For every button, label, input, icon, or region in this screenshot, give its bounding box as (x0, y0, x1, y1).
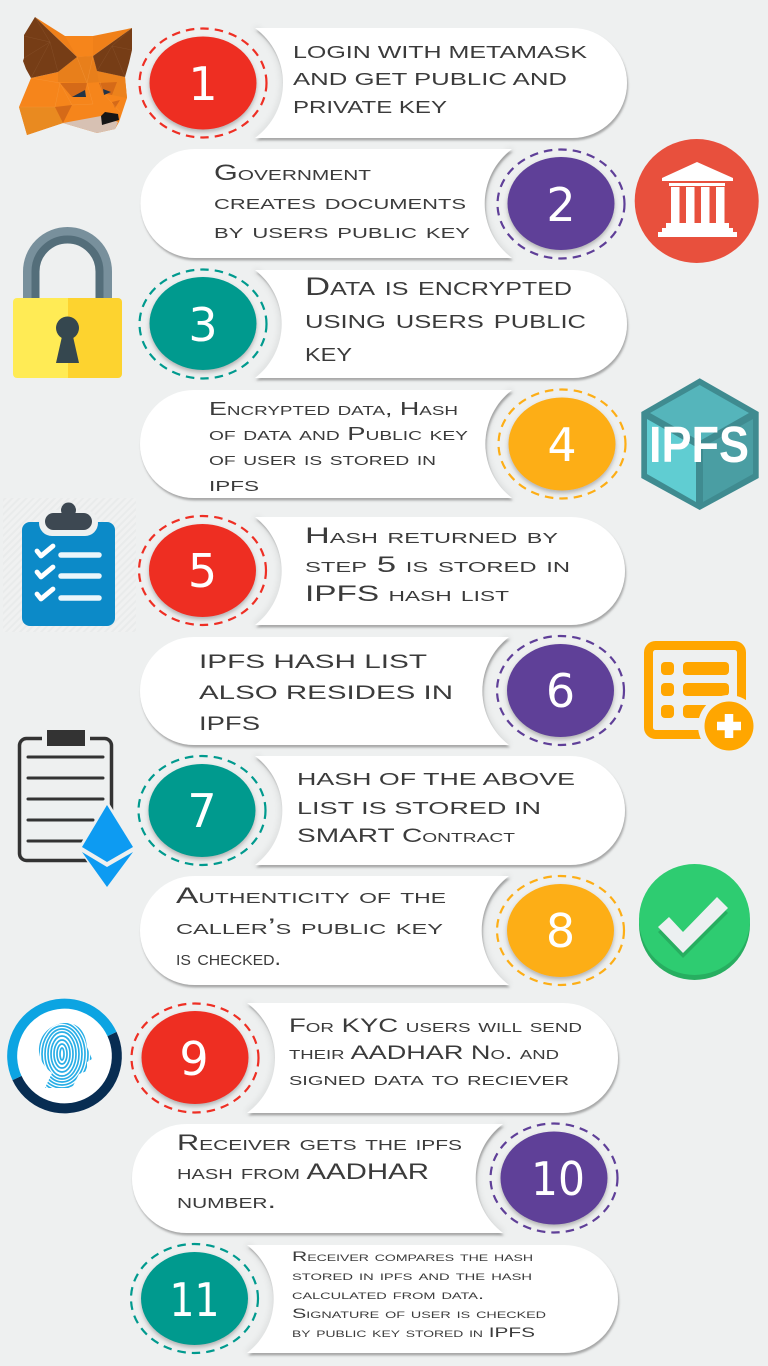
text 8: Authenticity of the (176, 883, 446, 908)
ribbon 6 (140, 637, 509, 745)
step 5 (139, 516, 625, 625)
icon: fingerprint head (12, 1004, 117, 1108)
text 7: HASH OF THE ABOVE (297, 769, 575, 789)
icon: government building (635, 139, 759, 263)
text 5: Hash returned by (305, 523, 558, 548)
number badge 6 (497, 636, 624, 745)
ribbon 9 (247, 1003, 618, 1113)
number badge 2: 2 (546, 178, 576, 232)
number badge 9 (132, 1004, 258, 1112)
text 11: by public key stored in IPFS (292, 1325, 535, 1340)
icon: IPFS cube (641, 378, 759, 510)
text 11: calculated from data. (292, 1287, 484, 1302)
icon: IPFS cube: IPFS (649, 416, 749, 473)
text 5: step 5 is stored in (305, 552, 570, 577)
step 11 (131, 1244, 618, 1353)
text 5: IPFS hash list (305, 581, 509, 606)
number badge 11: 11 (170, 1273, 220, 1327)
number badge 6: 6 (546, 664, 575, 718)
text 10: number. (177, 1188, 276, 1213)
number badge 3: 3 (188, 298, 218, 352)
step 6 (140, 636, 624, 745)
text 6: IPFS HASH LIST (199, 652, 428, 673)
text 9: signed data to reciever (289, 1069, 569, 1090)
text 4: of user is stored in (209, 448, 436, 469)
step 10 (132, 1124, 618, 1233)
ribbon 8 (140, 876, 509, 985)
ribbon 2 (140, 149, 512, 258)
icon: green check (639, 864, 750, 980)
number badge 10: 10 (531, 1152, 585, 1206)
text 9 (289, 1016, 582, 1090)
text 8: caller’s public key (176, 914, 443, 939)
ribbon 11 (247, 1245, 618, 1353)
text 1: AND GET PUBLIC AND (293, 69, 567, 89)
ribbon 10 (132, 1124, 503, 1233)
ribbon 5 (255, 517, 625, 625)
text 11 (292, 1249, 547, 1340)
number badge 7: 7 (187, 784, 217, 838)
text 2: Government (214, 160, 371, 185)
step 1 (140, 28, 627, 138)
step 7 (138, 756, 625, 865)
icon: list with plus (648, 646, 760, 757)
number badge 10 (490, 1124, 618, 1232)
number badge 8: 8 (546, 904, 575, 958)
text 2: by users public key (214, 218, 470, 243)
text 7: LIST IS STORED IN (297, 798, 541, 818)
text 10: Receiver gets the ipfs (177, 1130, 462, 1155)
text 11: stored in ipfs and the hash (292, 1268, 532, 1283)
number badge 5 (139, 516, 266, 625)
text 4: Encrypted data, Hash (209, 398, 458, 419)
text 6 (199, 652, 453, 735)
ribbon 3 (255, 270, 627, 378)
icon: contract with ethereum (20, 728, 137, 892)
number badge 8 (497, 876, 624, 985)
text 11: Receiver compares the hash (292, 1249, 533, 1264)
text 10 (177, 1130, 462, 1213)
text 8 (176, 883, 446, 970)
text 3: key (305, 339, 352, 367)
text 4: IPFS (209, 478, 259, 495)
number badge 4: 4 (547, 418, 577, 472)
text 3: using users public (305, 306, 586, 334)
text 4 (209, 398, 468, 495)
text 9: For KYC users will send (289, 1016, 582, 1037)
text 2: creates documents (214, 189, 466, 214)
step 9 (132, 1003, 618, 1113)
text 10: hash from AADHAR (177, 1159, 429, 1184)
step 4 (140, 390, 626, 498)
text 9: their AADHAR No. and (289, 1043, 559, 1064)
text 11: Signature of user is checked (292, 1306, 547, 1321)
number badge 1: 1 (188, 57, 218, 111)
icon: metamask fox (19, 17, 132, 135)
number badge 7 (138, 756, 266, 865)
ribbon 7 (255, 756, 625, 865)
number badge 9: 9 (179, 1032, 209, 1086)
number badge 4 (498, 390, 626, 498)
text 1: PRIVATE KEY (293, 97, 447, 117)
number badge 1 (140, 28, 266, 138)
number badge 3 (140, 270, 266, 378)
text 7: SMART Contract (297, 826, 515, 847)
text 4: of data and Public key (209, 423, 468, 444)
number badge 11 (131, 1244, 258, 1353)
text 8: is checked. (176, 945, 281, 970)
text 5 (305, 523, 570, 606)
step 8 (140, 876, 624, 985)
text 6: ALSO RESIDES IN (199, 683, 453, 704)
step 2 (140, 149, 624, 258)
number badge 5: 5 (188, 544, 217, 598)
icon: checklist clipboard (3, 498, 136, 632)
text 3: Data is encrypted (305, 273, 572, 301)
text 7 (297, 769, 575, 847)
number badge 2 (498, 150, 624, 258)
text 1: LOGIN WITH METAMASK (293, 42, 587, 62)
text 1 (293, 42, 587, 117)
step 3 (140, 270, 627, 378)
ribbon 1 (255, 28, 627, 138)
ribbon 4 (140, 390, 512, 498)
text 6: IPFS (199, 714, 260, 735)
text 3 (305, 273, 586, 367)
icon: padlock (13, 232, 122, 378)
text 2 (214, 160, 470, 243)
